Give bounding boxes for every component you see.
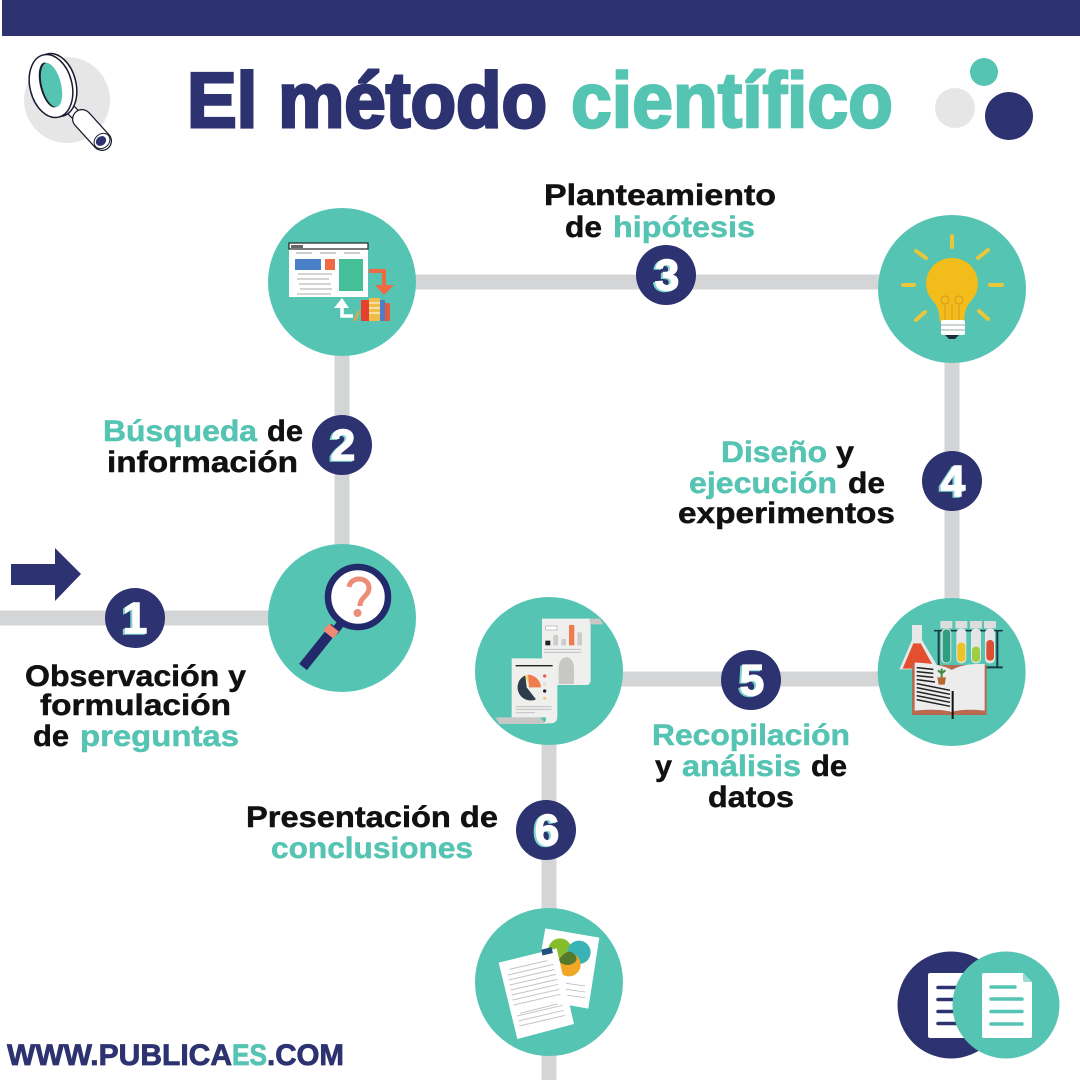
label: step 2: de bbox=[267, 415, 303, 448]
label: step 4: experimentos bbox=[678, 497, 895, 530]
label: step 1 bbox=[25, 660, 246, 753]
label: step 5: y bbox=[655, 750, 672, 783]
step 1 badge: 1 bbox=[123, 594, 147, 643]
step 6 badge: 6 bbox=[535, 806, 559, 855]
step 1 circle: magnifier with question mark bbox=[268, 544, 416, 692]
label: step 5: análisis bbox=[682, 750, 801, 783]
step 4 badge bbox=[922, 451, 982, 511]
website footer: ES bbox=[232, 1039, 267, 1072]
label: step 4 bbox=[678, 436, 895, 530]
step 3 badge: 3 bbox=[655, 251, 679, 300]
arrow bbox=[11, 548, 81, 601]
step 6 circle: documents and venn diagram bbox=[475, 908, 623, 1056]
step 5 badge bbox=[721, 650, 781, 710]
label: step 4: ejecución bbox=[689, 467, 837, 500]
step 2 badge bbox=[312, 415, 372, 475]
label: step 1: Observación y bbox=[25, 660, 246, 693]
label: step 1: preguntas bbox=[80, 720, 239, 753]
label: step 4: de bbox=[848, 467, 885, 500]
label: step 5: Recopilación bbox=[652, 719, 850, 752]
label: step 3: hipótesis bbox=[613, 211, 755, 244]
label: step 6 bbox=[246, 801, 498, 865]
label: step 3: de bbox=[565, 211, 602, 244]
label: step 1: formulación bbox=[40, 689, 231, 722]
connector path bbox=[0, 282, 952, 1080]
step 4 badge: 4 bbox=[941, 457, 966, 506]
label: step 4: Diseño bbox=[721, 436, 827, 469]
label: step 5 bbox=[652, 719, 850, 814]
title: científico bbox=[571, 56, 893, 144]
label: step 6: conclusiones bbox=[271, 832, 473, 865]
step 5 circle: data reports bbox=[475, 597, 623, 745]
title bbox=[187, 56, 893, 144]
label: step 6: Presentación de bbox=[246, 801, 498, 834]
label: step 5: de bbox=[811, 750, 847, 783]
step 3 badge bbox=[636, 245, 696, 305]
step 4 circle: flask, test tubes and book bbox=[878, 598, 1026, 746]
step 2 badge: 2 bbox=[331, 421, 355, 470]
website footer: .COM bbox=[267, 1039, 344, 1072]
title: El método bbox=[187, 56, 547, 144]
step 3 circle: light bulb bbox=[878, 215, 1026, 363]
label: step 1: de bbox=[33, 720, 69, 753]
label: step 2 bbox=[103, 415, 303, 479]
label: step 3: Planteamiento bbox=[544, 179, 776, 212]
step 5 badge: 5 bbox=[740, 656, 764, 705]
icon: overlapping documents bbox=[898, 952, 1060, 1058]
step 1 badge bbox=[105, 588, 165, 648]
website footer bbox=[7, 1039, 344, 1072]
step 6 badge bbox=[516, 800, 576, 860]
label: step 2: Búsqueda bbox=[103, 415, 257, 448]
decorative dots bbox=[935, 58, 1033, 140]
website footer: WWW.PUBLICA bbox=[7, 1039, 232, 1072]
label: step 5: datos bbox=[708, 781, 794, 814]
icon: magnifying glass bbox=[23, 49, 113, 152]
step 2 circle: web page and books bbox=[268, 208, 416, 356]
label: step 3 bbox=[544, 179, 776, 244]
label: step 4: y bbox=[836, 436, 854, 469]
top bar bbox=[2, 0, 1080, 36]
label: step 2: información bbox=[107, 446, 298, 479]
